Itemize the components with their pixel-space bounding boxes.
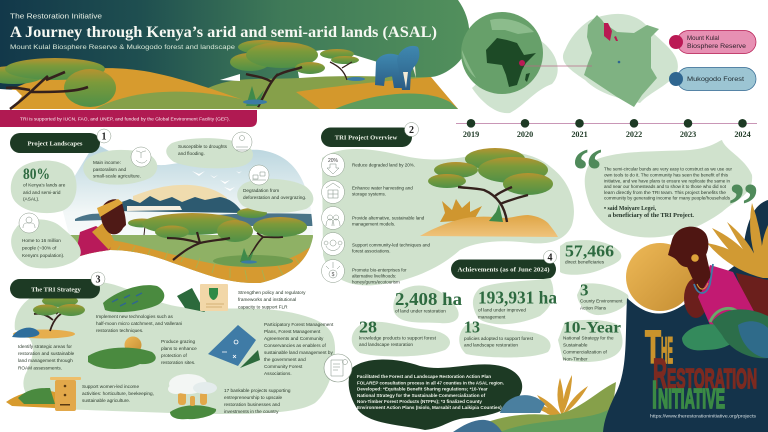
timeline: 2022 (626, 130, 642, 139)
strategy panel: capacity to support FLR (238, 304, 288, 310)
leaves (707, 203, 768, 278)
overview panel: Support community-led techniques and (352, 242, 431, 248)
quote body (604, 166, 732, 200)
elephant (375, 46, 419, 90)
bankable projects illustration (168, 374, 217, 419)
logo wordmark: R (653, 350, 667, 397)
quote attribution: a beneficiary of the TRI Project. (608, 213, 695, 219)
strategy panel: 17 bankable projects supporting (224, 388, 291, 393)
stat: 57,466: 57,466 (565, 242, 614, 260)
icon: community (322, 232, 344, 256)
stat: 3: 3 (580, 280, 588, 300)
tree illustration (12, 295, 85, 338)
strategy panel: investments in the country (224, 409, 279, 414)
person (75, 199, 126, 258)
strategy panel: Agreements and Community (264, 336, 324, 341)
quote body: The semi-circular bunds are very easy to construct as we use our (604, 166, 732, 172)
quote open: “ (572, 137, 603, 205)
timeline: 2023 (680, 130, 696, 139)
birds (192, 171, 242, 191)
stat: 13: and landscape restoration (464, 342, 518, 348)
section heading: The TRI Strategy: The TRI Strategy (31, 286, 82, 294)
stat: 3: Action Plans (580, 306, 607, 310)
stat bubble: population (11, 213, 81, 268)
quote body: initiative, and we have plans to ensure we replicate the same in (604, 178, 730, 183)
strategy panel: sustainable land management by (264, 350, 333, 355)
logo wordmark: HE (661, 330, 673, 371)
callout: dark panel: Non-Timber Forest Products (NTFPs); *3 finalized County (357, 399, 482, 404)
strategy panel: Plans, Forest Management (264, 329, 321, 334)
stat bubble: 80%: of Kenya's lands are (23, 182, 66, 188)
woman (668, 227, 768, 325)
stat: 193,931 ha (473, 278, 557, 324)
strategy panel: frameworks and institutional (238, 297, 296, 302)
section heading: TRI Project Overview: 2 (409, 125, 414, 136)
title: A Journey through Kenya’s arid and semi-arid lands (ASAL) (10, 24, 437, 41)
kicker: The Restoration Initiative (10, 12, 102, 20)
stat bubble: droughts (166, 132, 253, 168)
overview panel: forest associations. (352, 248, 391, 254)
strategy panel: land management through (18, 358, 73, 363)
callout: dark panel: FOLAREP consultation process in all 47 counties in the ASAL region. (357, 380, 504, 386)
callout: dark panel: Environment Action Plans (Isiolo, Marsabit and Laikipia Counties). (357, 405, 503, 410)
strategy panel: Identify strategic areas for (18, 344, 72, 349)
callout: dark panel: Facilitated the Forest and Landscape Restoration Action Plan (357, 374, 491, 379)
quote attribution: • said Moiyare Legei, (604, 206, 657, 212)
timeline (456, 119, 757, 139)
subtitle: Mount Kulal Biosphere Reserve & Mukogodo forest and landscape (10, 44, 235, 51)
stat: 2,408 ha (393, 286, 462, 323)
stat: 28: knowledge products to support forest (359, 336, 437, 340)
mountain (133, 184, 227, 203)
half-moon field (103, 285, 164, 312)
stat bubble: 80%: 80% (23, 166, 50, 183)
header banner (0, 0, 469, 109)
section heading: Achievements: 4 (548, 252, 552, 264)
legend: Mount Kulal: Mount Kulal (687, 35, 719, 42)
stat bubble: main income: pastoralism and (93, 167, 126, 172)
logo wordmark (645, 321, 757, 417)
logo wordmark: I (652, 374, 657, 417)
strategy panel: Implement new technologies such as (96, 314, 174, 319)
globe map (461, 12, 558, 113)
callout: dark panel (349, 359, 522, 430)
strategy panel: Associations. (264, 371, 292, 376)
stat: 28: and landscape restoration (359, 342, 413, 347)
strategy panel: sustainable agriculture. (82, 398, 130, 403)
section heading: Project Landscapes: Project Landscapes (27, 140, 83, 148)
quote close: ” (728, 172, 759, 240)
strategy panel: the government and (264, 357, 306, 362)
stat: 57,466: direct beneficiaries (565, 260, 605, 264)
strategy panel: Conservancies as enablers of (264, 343, 326, 348)
stat: 10-Year: 10-Year (563, 320, 621, 336)
stat bubble: population: Kenya's population). (22, 253, 64, 258)
stat bubble: droughts: Susceptible to droughts (178, 144, 228, 149)
strategy panel: ROAM assessments. (18, 366, 62, 370)
stat: 10-Year: Sustainable (563, 342, 588, 348)
stat bubble: population: people (~30% of (22, 246, 57, 250)
overview panel: Reduce degraded land by 20%. (352, 162, 415, 168)
stat bubble: droughts: and flooding. (178, 151, 205, 156)
stat: 57,466 (560, 240, 621, 275)
legend: Mukogodo (669, 68, 756, 90)
header landscape hills (0, 50, 458, 109)
stat bubble: population: Home to 16 million (22, 238, 61, 243)
section heading: Project Landscapes: 1 (102, 132, 106, 142)
sun (626, 243, 694, 311)
beehive (6, 377, 81, 411)
section heading: The TRI Strategy (10, 272, 105, 298)
icon: certificate (324, 354, 352, 382)
stat bubble: degradation (237, 165, 313, 213)
quote body: community by generating income for many people/households (604, 196, 731, 200)
lower hills and agave (453, 375, 616, 432)
grazing land (88, 336, 156, 369)
icon: water (322, 180, 344, 204)
stat bubble: 80% (11, 160, 77, 213)
overview panel: honey/gums/ecotourism (352, 280, 400, 284)
section heading: TRI Project Overview (321, 122, 418, 147)
kenya map (563, 14, 678, 107)
timeline: 2019 (463, 130, 479, 139)
stat: 13: policies adopted to support forest (464, 336, 534, 341)
strategy panel: Participatory Forest Management (264, 322, 334, 327)
website: https://www.therestorationinitiative.org/projects (650, 414, 757, 418)
logo wordmark: T (645, 321, 661, 373)
icon: people (322, 206, 344, 230)
strategy panel: Community Forest (264, 364, 303, 369)
connector line (524, 65, 592, 67)
stat: 13 (459, 318, 551, 358)
section heading: The TRI Strategy: 3 (96, 274, 100, 286)
portrait panel (603, 200, 768, 432)
stat bubble: main income: Main income: (93, 160, 121, 165)
quote panel (572, 137, 759, 240)
strategy panel: restoration businesses and (224, 402, 280, 407)
icon: 20 percent (322, 154, 344, 176)
legend: Mukogodo: Mukogodo Forest (687, 76, 744, 83)
stat: 10-Year: Commercialization of (563, 350, 607, 354)
stat bubble: 80%: (ASAL). (23, 196, 39, 202)
tree: header left (0, 58, 116, 109)
section heading: Achievements: Achievements (as of June 2024) (458, 266, 550, 274)
strategy panel: plans to enhance (161, 346, 197, 351)
stat bubble: degradation: Degradation from (243, 188, 279, 193)
strategy panel: entrepreneurship to upscale (224, 395, 283, 400)
acacia tree (128, 208, 307, 264)
stat bubble: main income: small-scale agriculture. (93, 174, 141, 178)
section heading: TRI Project Overview: TRI Project Overview (335, 134, 397, 142)
strategy panel: Produce grazing (161, 339, 196, 344)
stat: 2,408 ha: of land under restoration (395, 308, 446, 314)
section heading: Achievements (451, 250, 556, 279)
strategy panel: activities: horticulture, beekeeping, (82, 391, 154, 396)
overview panel: Enhance water harvesting and (352, 186, 413, 190)
funding banner (0, 110, 257, 127)
quote attribution (604, 206, 695, 219)
strategy panel (6, 282, 335, 419)
funding banner: TRI is supported by IUCN, FAO, and UNEP, and funded by the Global Environment Facility (GEF). (20, 116, 230, 122)
stat: 2,408 ha: 2,408 ha (395, 289, 462, 309)
legend: Mount Kulal (669, 30, 756, 54)
timeline: 2024 (734, 130, 751, 139)
tree: header small (320, 49, 365, 81)
stat: 10-Year: Non-Timber (563, 356, 588, 362)
strategy panel: Support women-led income (82, 384, 139, 389)
strategy panel: restoration techniques. (96, 328, 143, 333)
monstera leaves (682, 308, 768, 358)
strategy panel: half-moon micro catchment, and Vallerani (96, 321, 182, 326)
quote body: and near our homesteads and to show it to those who did not (604, 184, 727, 189)
section heading: Project Landscapes (10, 129, 111, 153)
icon: bio-enterprise (322, 260, 344, 282)
landscape illustration (63, 146, 313, 283)
acacia tree (420, 148, 558, 237)
overview panel: management models. (352, 222, 395, 226)
overview panel: storage systems. (352, 192, 386, 196)
quote body: own tools to do it. The community has seen the benefit of this (604, 172, 729, 178)
stat: 10-Year (558, 320, 623, 362)
strategy panel: protection of (161, 353, 187, 358)
icon: bio-enterprise: $ (332, 272, 335, 278)
legend: Mount Kulal: Biosphere Reserve (687, 43, 747, 50)
stat: 3 (577, 280, 629, 315)
callout: dark panel: Developed: *Equitable Benefit Sharing regulations; *10-Year (357, 386, 488, 392)
stat: 193,931 ha: management (478, 314, 506, 320)
policy scroll (177, 284, 228, 312)
strategy panel: restoration sites. (161, 360, 195, 365)
stat bubble: degradation: deforestation and overgrazing. (243, 195, 306, 200)
timeline: 2021 (571, 130, 588, 139)
quote body: learn directly from the TRI team. This project benefits the (604, 190, 727, 195)
overview panel (322, 148, 574, 285)
stat: 28 (352, 318, 450, 356)
stat: 13: 13 (464, 318, 480, 336)
stat: 10-Year: National Strategy for the (563, 336, 614, 340)
strategy map (208, 325, 260, 368)
strategy panel: Strengthen policy and regulatory (238, 290, 306, 295)
strategy panel: restoration and sustainable (18, 351, 75, 356)
stat bubble: main income (83, 147, 157, 185)
stat: 193,931 ha: of land under improved (478, 308, 526, 312)
stat: 28: 28 (359, 318, 377, 336)
overview panel: Promote bio-enterprises for (352, 268, 407, 272)
tree: header centre (230, 40, 325, 107)
stat bubble: 80%: arid and semi-arid (23, 190, 61, 195)
overview panel: alternative livelihoods: (352, 274, 396, 278)
stat: 193,931 ha: 193,931 ha (478, 288, 557, 308)
callout: dark panel: National Strategy for the Sustainable Commercialization of (357, 393, 486, 398)
timeline: 2020 (517, 130, 533, 139)
icon: 20 percent: 20% (328, 158, 339, 164)
overview panel: Provide alternative, sustainable land (352, 216, 425, 220)
stat: 3: County Environment (580, 298, 623, 304)
